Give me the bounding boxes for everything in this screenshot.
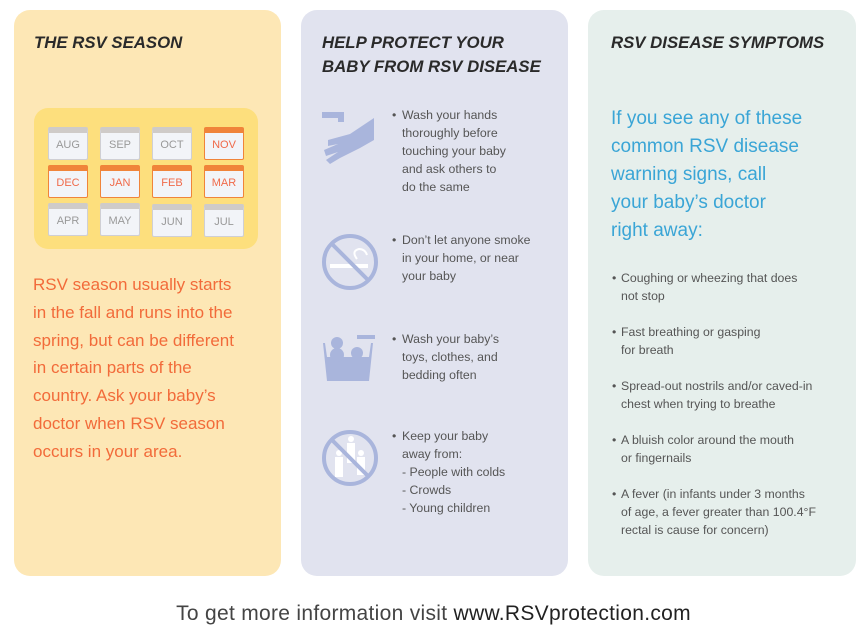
text: season description: in the fall and runs into the bbox=[33, 303, 232, 322]
text: season description: country. Ask your baby’s bbox=[33, 386, 216, 405]
text: Coughing or wheezing that does bbox=[621, 271, 797, 285]
icon: no smoking bbox=[322, 234, 378, 290]
text: not stop bbox=[621, 289, 665, 303]
calendar: SEP bbox=[109, 139, 131, 151]
text: Fast breathing or gasping bbox=[621, 325, 760, 339]
heading: help protect: HELP PROTECT YOUR bbox=[322, 33, 504, 52]
text: rectal is cause for concern) bbox=[621, 523, 769, 537]
panel: RSV season bbox=[14, 10, 281, 576]
text: for breath bbox=[621, 343, 674, 357]
text: wash toys bbox=[402, 330, 499, 384]
text: no smoking: Don’t let anyone smoke bbox=[402, 233, 531, 247]
panel: help protect bbox=[301, 10, 568, 576]
text: A bluish color around the mouth bbox=[621, 433, 794, 447]
icon: avoid people bbox=[322, 430, 378, 486]
text: season description: occurs in your area. bbox=[33, 442, 182, 461]
text: wash toys: Wash your baby’s bbox=[402, 332, 499, 346]
calendar: AUG bbox=[56, 139, 80, 151]
calendar: APR bbox=[57, 215, 79, 227]
calendar: JAN bbox=[110, 177, 130, 189]
icon: washing toys bbox=[323, 335, 375, 381]
text: of age, a fever greater than 100.4°F bbox=[621, 505, 816, 519]
calendar bbox=[34, 108, 258, 249]
text: season description: RSV season usually starts bbox=[33, 275, 231, 294]
text: keep away: Keep your baby bbox=[402, 429, 488, 443]
calendar: JUL bbox=[214, 216, 234, 228]
text: wash hands: Wash your hands bbox=[402, 108, 497, 122]
text: chest when trying to breathe bbox=[621, 397, 776, 411]
text: wash hands bbox=[402, 106, 506, 196]
icon: hand washing bbox=[322, 112, 374, 164]
calendar: NOV bbox=[212, 139, 236, 151]
heading: symptoms: RSV DISEASE SYMPTOMS bbox=[611, 33, 824, 52]
text: keep away: - Young children bbox=[402, 501, 490, 515]
text: warning intro: your baby’s doctor bbox=[611, 192, 766, 213]
text: warning intro: right away: bbox=[611, 220, 703, 241]
text: wash hands: do the same bbox=[402, 180, 470, 194]
text: keep away: away from: bbox=[402, 447, 462, 461]
text: no smoking bbox=[402, 231, 531, 285]
heading: RSV season: THE RSV SEASON bbox=[34, 33, 182, 52]
text: warning intro: If you see any of these bbox=[611, 108, 802, 129]
footer: To get more information visit www.RSVprotection.com bbox=[176, 602, 691, 625]
text: season description bbox=[33, 275, 234, 461]
calendar: JUN bbox=[161, 216, 183, 228]
calendar: DEC bbox=[56, 177, 80, 189]
text: no smoking: your baby bbox=[402, 269, 456, 283]
text: Spread-out nostrils and/or caved-in bbox=[621, 379, 812, 393]
text: wash hands: thoroughly before bbox=[402, 126, 498, 140]
list: symptoms bbox=[612, 271, 816, 537]
text: season description: doctor when RSV season bbox=[33, 414, 225, 433]
text: keep away: - Crowds bbox=[402, 483, 451, 497]
panel: symptoms bbox=[588, 10, 856, 576]
text: warning intro bbox=[611, 108, 802, 241]
text: wash toys: bedding often bbox=[402, 368, 477, 382]
text: season description: spring, but can be different bbox=[33, 331, 234, 350]
heading: help protect bbox=[322, 33, 542, 76]
text: wash toys: toys, clothes, and bbox=[402, 350, 498, 364]
text: warning intro: warning signs, call bbox=[611, 164, 766, 185]
text: A fever (in infants under 3 months bbox=[621, 487, 805, 501]
text: or fingernails bbox=[621, 451, 691, 465]
text: season description: in certain parts of the bbox=[33, 358, 192, 377]
text: keep away: - People with colds bbox=[402, 465, 505, 479]
text: keep away bbox=[402, 427, 505, 517]
calendar: OCT bbox=[160, 139, 184, 151]
calendar: MAY bbox=[108, 215, 132, 227]
text: warning intro: common RSV disease bbox=[611, 136, 799, 157]
heading: help protect: BABY FROM RSV DISEASE bbox=[322, 57, 541, 76]
calendar: MAR bbox=[212, 177, 236, 189]
text: no smoking: in your home, or near bbox=[402, 251, 519, 265]
text: wash hands: touching your baby bbox=[402, 144, 506, 158]
text: wash hands: and ask others to bbox=[402, 162, 496, 176]
calendar: FEB bbox=[161, 177, 183, 189]
